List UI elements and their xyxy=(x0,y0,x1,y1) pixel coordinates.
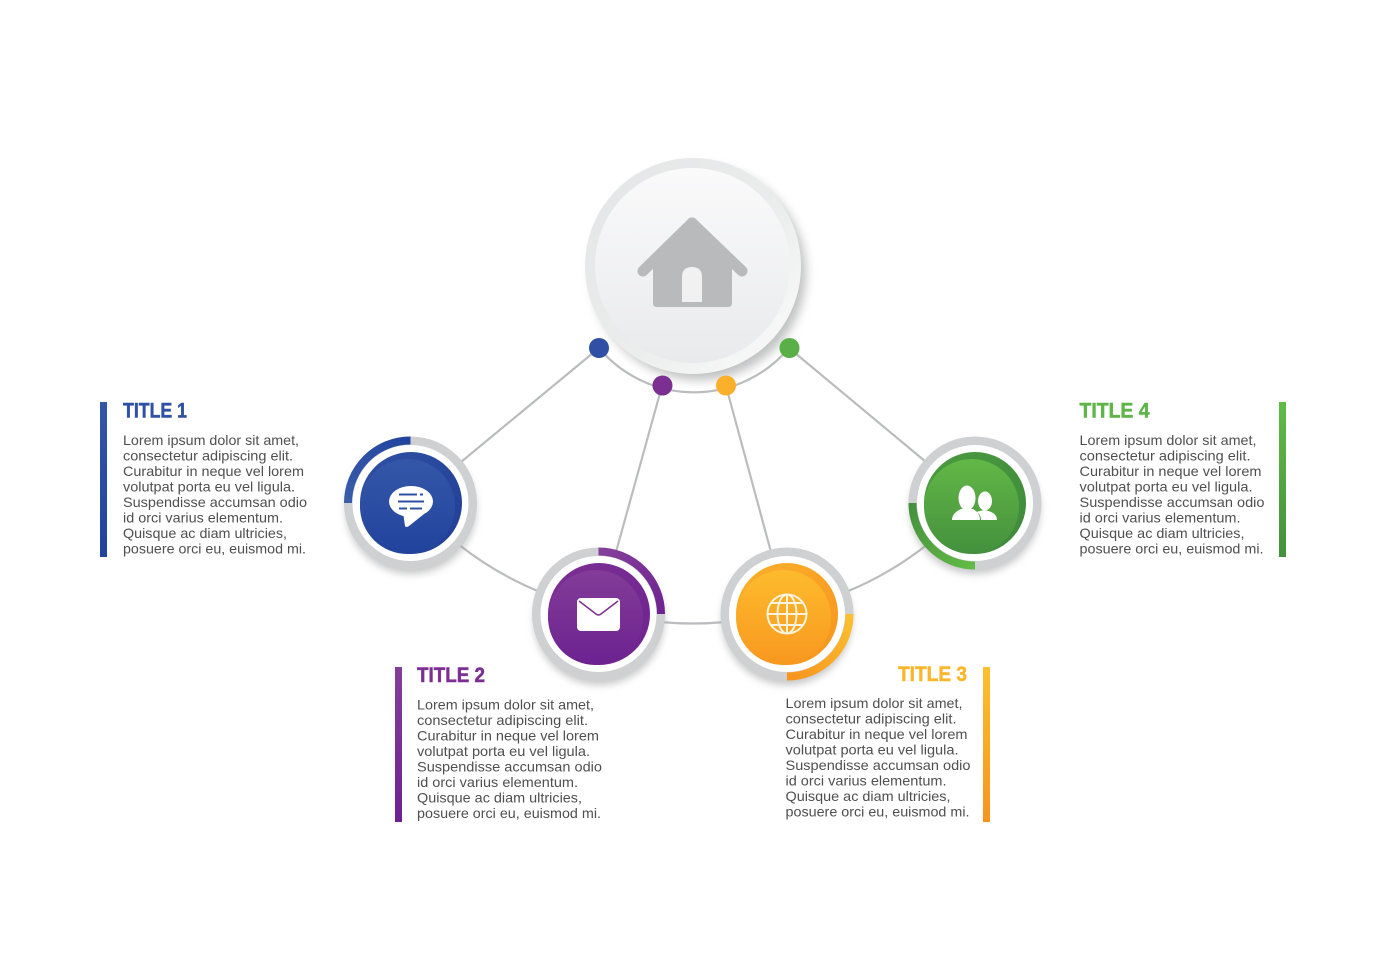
text block: title 1: volutpat porta eu vel ligula. xyxy=(123,480,295,494)
connector dot: blue xyxy=(589,338,609,358)
text block: title 2: Curabitur in neque vel lorem xyxy=(417,728,599,744)
text block: title 2: volutpat porta eu vel ligula. xyxy=(417,744,590,759)
heading: title 2: TITLE 2 xyxy=(417,664,485,687)
text block: title 2: id orci varius elementum. xyxy=(417,775,578,790)
text block: title 4: posuere orci eu, euismod mi. xyxy=(1080,542,1264,556)
text block: title 1: Lorem ipsum dolor sit amet, xyxy=(123,433,299,448)
text block: title 3: Lorem ipsum dolor sit amet, xyxy=(786,696,962,711)
text block: title 4: Lorem ipsum dolor sit amet, xyxy=(1080,433,1256,448)
icon: envelope xyxy=(577,598,620,631)
text block: title 2 xyxy=(417,698,602,821)
text block: title 3 xyxy=(786,696,970,820)
text block: title 4: Curabitur in neque vel lorem xyxy=(1080,464,1262,479)
connector dot: green xyxy=(780,338,800,358)
text block: title 2: posuere orci eu, euismod mi. xyxy=(417,806,601,821)
node 3: globe xyxy=(720,548,854,685)
text block: title 4: consectetur adipiscing elit. xyxy=(1080,448,1250,464)
icon: globe xyxy=(768,594,806,634)
text block: title 4: volutpat porta eu vel ligula. xyxy=(1080,480,1252,494)
text block: title 4: Suspendisse accumsan odio xyxy=(1080,495,1264,510)
text block: title 2: consectetur adipiscing elit. xyxy=(417,713,588,728)
text block: title 4: id orci varius elementum. xyxy=(1080,510,1240,526)
text block: title 2: Quisque ac diam ultricies, xyxy=(417,790,582,806)
text block: title 3: Curabitur in neque vel lorem xyxy=(786,727,968,742)
text block: title 1: Quisque ac diam ultricies, xyxy=(123,526,287,541)
icon: two people xyxy=(952,486,997,520)
text block: title 3: consectetur adipiscing elit. xyxy=(786,712,956,726)
text block: title 2: Lorem ipsum dolor sit amet, xyxy=(417,698,594,712)
text block: title 4: Quisque ac diam ultricies, xyxy=(1080,526,1244,541)
panel: title 4 xyxy=(1080,400,1286,557)
connector dot: orange xyxy=(716,376,736,396)
text block: title 1: Curabitur in neque vel lorem xyxy=(123,464,304,479)
panel: title 3 xyxy=(786,663,990,822)
heading: title 1: TITLE 1 xyxy=(123,400,187,422)
text block: title 1 xyxy=(123,433,307,556)
heading: title 4: TITLE 4 xyxy=(1080,400,1150,422)
text block: title 1: posuere orci eu, euismod mi. xyxy=(123,542,306,556)
panel: title 2 xyxy=(395,664,602,822)
connector lines xyxy=(458,348,928,624)
icon: house xyxy=(643,221,742,307)
node 2: mail xyxy=(532,548,665,685)
text block: title 3: Quisque ac diam ultricies, xyxy=(786,789,950,804)
heading: title 3: TITLE 3 xyxy=(898,663,967,686)
text block: title 3: posuere orci eu, euismod mi. xyxy=(786,804,970,820)
text block: title 3: volutpat porta eu vel ligula. xyxy=(786,742,958,758)
text block: title 1: Suspendisse accumsan odio xyxy=(123,495,307,510)
text block: title 2: Suspendisse accumsan odio xyxy=(417,760,602,774)
text block: title 3: Suspendisse accumsan odio xyxy=(786,758,970,773)
text block: title 3: id orci varius elementum. xyxy=(786,774,946,788)
text block: title 1: consectetur adipiscing elit. xyxy=(123,448,293,464)
panel: title 1 xyxy=(100,400,307,557)
central home node xyxy=(585,158,806,380)
text block: title 4 xyxy=(1080,433,1264,556)
node 1: chat xyxy=(344,436,477,574)
text block: title 1: id orci varius elementum. xyxy=(123,510,283,526)
node 4: people xyxy=(908,436,1042,574)
connector dot: purple xyxy=(652,376,672,396)
icon: speech bubble xyxy=(389,486,433,527)
